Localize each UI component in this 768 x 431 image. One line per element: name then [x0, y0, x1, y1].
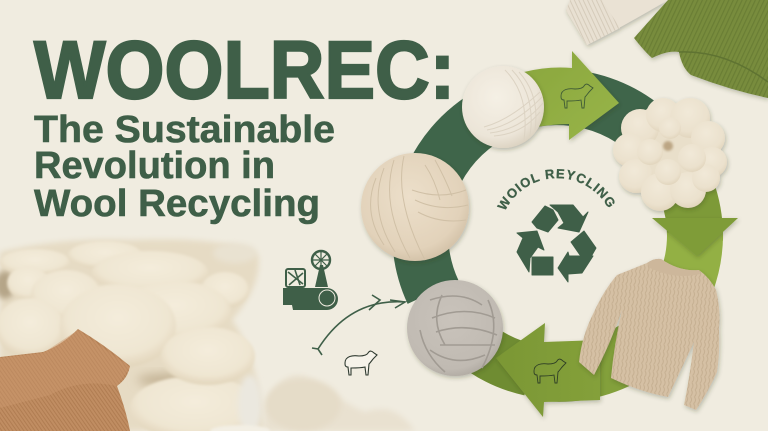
- right arrow: [652, 218, 738, 256]
- subtitle line 1: The Sustainable: [34, 109, 335, 151]
- center label: WOIOL REYCLING: [496, 169, 615, 210]
- subtitle line 3: Wool Recycling: [34, 183, 320, 225]
- heading: WOOLREC: WOOLREC:: [34, 25, 455, 116]
- olive arc right: [660, 145, 695, 240]
- spinning wheel tower: [315, 265, 328, 287]
- sheep icon bottom: [534, 359, 566, 383]
- wool jar: [286, 269, 305, 287]
- brown knit sweater corner: [0, 329, 130, 431]
- bottom arrow: [496, 323, 600, 417]
- subtitle line 2: Revolution in: [34, 145, 275, 187]
- yarn ball: cream: [462, 66, 544, 148]
- top-right green sweater: [634, 0, 768, 98]
- recycling symbol: [517, 205, 596, 282]
- raw wool pile: [0, 239, 415, 431]
- curved arrow: [312, 295, 405, 355]
- factory icon: [283, 251, 338, 310]
- light arc lower right: [660, 232, 695, 326]
- wool fleece puff: [613, 98, 727, 211]
- olive arc bottom left: [470, 340, 530, 370]
- top arrow: [524, 51, 619, 140]
- cable-knit sweater: [579, 259, 720, 410]
- fabric roll: [283, 288, 338, 310]
- title: [34, 25, 455, 225]
- collar: [647, 259, 700, 276]
- dark green arc: [420, 97, 640, 292]
- recycling ring: [420, 51, 738, 417]
- yarn ball: beige: [361, 153, 469, 261]
- sheep icon top: [561, 84, 593, 108]
- top-right cream sleeve: [566, 0, 668, 45]
- sheep icon free: [345, 351, 377, 375]
- yarn ball: grey: [407, 280, 503, 376]
- olive arc bottom: [544, 338, 650, 373]
